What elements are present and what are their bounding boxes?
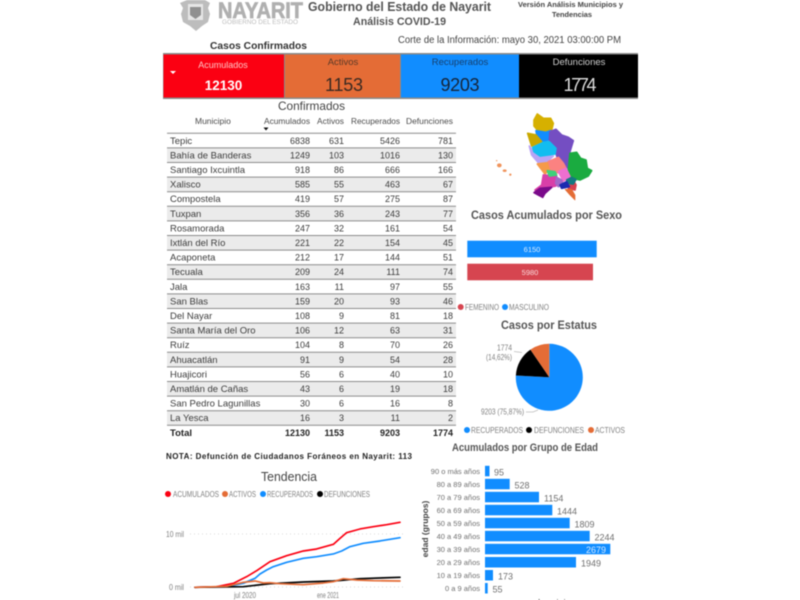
- card: recuperados: [401, 54, 519, 98]
- row: Tuxpan: 243: [385, 209, 400, 219]
- age 50-59: 50 a 59 años: [437, 519, 480, 528]
- row: Amatlán de Cañas: 19: [390, 384, 400, 394]
- age 10-19: 10 a 19 años: [437, 571, 480, 580]
- panel: KPI cards: [163, 53, 638, 99]
- age 60-69: 60 a 69 años: [437, 506, 480, 515]
- row: Bahía de Banderas: 1016: [380, 150, 400, 160]
- table header: [195, 116, 453, 130]
- version note: [518, 0, 624, 19]
- row: Ruíz: 26: [443, 340, 453, 350]
- card: activos: 1153: [325, 75, 363, 95]
- row: San Pedro Lagunillas: 16: [390, 399, 400, 409]
- row: Tepic: 781: [438, 136, 453, 146]
- table header: Defunciones: [406, 116, 453, 126]
- row: Ahuacatlán: [170, 355, 453, 366]
- row: Huajicori: 10: [443, 369, 453, 379]
- row: Tepic: [170, 136, 453, 147]
- row: Tuxpan: [170, 209, 453, 220]
- row: Del Nayar: 108: [295, 311, 310, 321]
- card: acumulados: 12130: [205, 78, 242, 93]
- row: La Yesca: 2: [448, 413, 453, 423]
- row: Del Nayar: 81: [390, 311, 400, 321]
- age 40-49: [437, 531, 615, 542]
- row: Huajicori: [170, 369, 453, 380]
- cut-off date: Corte de la Información: mayo 30, 2021 03:00:00 PM: [398, 35, 621, 46]
- card: acumulados: Acumulados: [198, 60, 248, 70]
- row: Xalisco: 585: [295, 180, 310, 190]
- row: Ahuacatlán: 54: [390, 355, 400, 365]
- card: defunciones: Defunciones: [553, 57, 606, 68]
- row: Amatlán de Cañas: [170, 384, 453, 395]
- legend: status: DEFUNCIONES: [534, 426, 584, 435]
- row: Total: 1153: [324, 428, 344, 438]
- pie label: defunciones: 1774: [497, 344, 512, 352]
- row: Del Nayar: [170, 311, 453, 322]
- row: Ruíz: 8: [339, 340, 344, 350]
- table header: Acumulados: [264, 116, 310, 126]
- row: Santa María del Oro: 63: [390, 326, 400, 336]
- legend: trend: [165, 490, 370, 499]
- row: San Pedro Lagunillas: 6: [339, 399, 344, 409]
- row: Ahuacatlán: 9: [339, 355, 344, 365]
- logo: Nayarit government: [180, 0, 303, 31]
- legend: sex: MASCULINO: [509, 303, 549, 312]
- note: foreign citizens deaths: NOTA: Defunción de Ciudadanos Foráneos en Nayarit: 113: [166, 452, 413, 461]
- row: Bahía de Banderas: Bahía de Banderas: [170, 150, 252, 161]
- row: Rosamorada: 161: [385, 223, 400, 233]
- row: La Yesca: 3: [339, 413, 344, 423]
- legend: status: [464, 426, 625, 435]
- table header: Municipio: [195, 116, 231, 126]
- row: Santa María del Oro: 106: [295, 326, 310, 336]
- axis labels: ene 2021: [317, 591, 339, 600]
- pie label: defunciones: [486, 344, 512, 362]
- row: Acaponeta: 51: [443, 253, 453, 263]
- row: Rosamorada: 54: [443, 223, 453, 233]
- row: Amatlán de Cañas: 43: [300, 384, 310, 394]
- pie label: recuperados: 9203 (75,87%): [481, 408, 524, 416]
- row: Xalisco: 55: [334, 180, 344, 190]
- row: Total: Total: [170, 428, 192, 439]
- line chart: trend: [166, 522, 405, 600]
- row: San Blas: 20: [334, 296, 344, 306]
- row: Tecuala: Tecuala: [170, 267, 203, 278]
- row: Ahuacatlán: 28: [443, 355, 453, 365]
- line: defunciones: [195, 577, 400, 587]
- age 30-39: 30 a 39 años: [437, 545, 480, 554]
- age 70-79: 1154: [544, 494, 563, 504]
- row: San Pedro Lagunillas: 8: [448, 399, 453, 409]
- card: defunciones: 1774: [564, 75, 596, 95]
- age 80-89: 80 a 89 años: [437, 480, 480, 489]
- row: Total: 9203: [380, 428, 400, 438]
- row: Santiago Ixcuintla: 918: [295, 165, 310, 175]
- card: acumulados: [164, 54, 284, 98]
- row: Tuxpan: Tuxpan: [170, 209, 201, 220]
- version note: Tendencias: [552, 10, 592, 19]
- row: Xalisco: 67: [443, 180, 453, 190]
- card: activos: [285, 54, 400, 98]
- legend: sex: FEMENINO: [465, 303, 499, 312]
- row: Huajicori: 56: [300, 369, 310, 379]
- row: Tecuala: 111: [386, 267, 400, 277]
- row: Acaponeta: 212: [295, 253, 310, 263]
- age 0-9: 55: [492, 584, 503, 594]
- row: Acaponeta: 17: [334, 253, 344, 263]
- row: San Blas: [170, 296, 453, 307]
- row: Amatlán de Cañas: 18: [443, 384, 453, 394]
- row: Jala: 11: [335, 282, 344, 292]
- age 30-39: 2679: [586, 545, 606, 555]
- bar: femenino: 5980: [522, 268, 538, 277]
- row: Ixtlán del Río: 154: [385, 238, 400, 248]
- row: Xalisco: [170, 180, 453, 191]
- row: Amatlán de Cañas: 6: [339, 384, 344, 394]
- legend: trend: DEFUNCIONES: [324, 490, 370, 499]
- age 70-79: 70 a 79 años: [437, 493, 480, 502]
- legend: trend: ACUMULADOS: [173, 490, 219, 499]
- row: Ruíz: 70: [390, 340, 400, 350]
- row: Compostela: 87: [443, 194, 453, 204]
- row: Compostela: 419: [295, 194, 310, 204]
- table header: Recuperados: [351, 116, 400, 126]
- row: Rosamorada: 247: [295, 223, 310, 233]
- row: Ahuacatlán: Ahuacatlán: [170, 355, 218, 366]
- icon: coat of arms shield: [180, 0, 210, 31]
- heading: casos confirmados: Casos Confirmados: [210, 40, 307, 52]
- card: activos: Activos: [328, 57, 359, 68]
- row: San Blas: 46: [443, 296, 453, 306]
- legend: status: ACTIVOS: [595, 426, 625, 435]
- age 50-59: [437, 518, 595, 530]
- line: recuperados: [195, 538, 400, 587]
- heading: tendencia: Tendencia: [261, 469, 318, 484]
- pie chart: status: [481, 344, 583, 416]
- row: Ixtlán del Río: 22: [334, 238, 344, 248]
- row: Bahía de Banderas: 103: [329, 150, 344, 160]
- legend: trend: RECUPERADOS: [267, 490, 313, 499]
- row: Ixtlán del Río: [170, 238, 453, 249]
- row: Acaponeta: Acaponeta: [170, 253, 216, 264]
- card: recuperados: Recuperados: [432, 57, 489, 68]
- row: Tecuala: 74: [443, 267, 453, 277]
- row: Total: 12130: [285, 428, 310, 438]
- row: La Yesca: [170, 413, 453, 424]
- row: Santa María del Oro: 31: [443, 326, 453, 336]
- legend: status: RECUPERADOS: [471, 426, 523, 435]
- row: Del Nayar: 9: [339, 311, 344, 321]
- row: Acaponeta: [170, 253, 453, 264]
- row: Tuxpan: 36: [334, 209, 344, 219]
- subtitle: Análisis COVID-19: [353, 16, 446, 28]
- age 30-39: [437, 544, 610, 555]
- row: Tepic: Tepic: [170, 136, 192, 147]
- row: Jala: 163: [295, 282, 310, 292]
- age 40-49: 2244: [594, 532, 615, 542]
- row: Total: [170, 428, 453, 439]
- card: defunciones: [519, 54, 638, 98]
- age 10-19: 173: [498, 572, 513, 582]
- row: Acaponeta: 144: [385, 253, 400, 263]
- age 80-89: 528: [514, 480, 530, 490]
- row: Bahía de Banderas: 1249: [290, 150, 310, 160]
- row: Tepic: 631: [329, 136, 344, 146]
- row: San Blas: San Blas: [170, 296, 208, 307]
- row: Bahía de Banderas: 130: [438, 150, 453, 160]
- axis labels: [166, 530, 339, 600]
- row: San Pedro Lagunillas: San Pedro Lagunillas: [170, 399, 261, 410]
- age 60-69: [437, 505, 577, 516]
- axis labels: 10 mil: [166, 530, 184, 539]
- age 90+: [431, 466, 504, 478]
- row: Tecuala: [170, 267, 453, 278]
- row: Ahuacatlán: 91: [300, 355, 310, 365]
- row: Bahía de Banderas: [170, 150, 453, 161]
- row: Tecuala: 24: [334, 267, 344, 277]
- heading: acumulados por grupo de edad: Acumulados por Grupo de Edad: [452, 442, 598, 454]
- row: Huajicori: 6: [339, 369, 344, 379]
- row: Total: 1774: [433, 428, 453, 438]
- row: Del Nayar: Del Nayar: [170, 311, 212, 322]
- row: Tuxpan: 356: [295, 209, 310, 219]
- row: San Blas: 93: [390, 296, 400, 306]
- row: San Pedro Lagunillas: 30: [300, 399, 310, 409]
- row: Jala: [170, 282, 453, 293]
- row: La Yesca: 16: [300, 413, 310, 423]
- age 40-49: 40 a 49 años: [437, 532, 480, 541]
- row: La Yesca: La Yesca: [170, 413, 209, 424]
- row: La Yesca: 11: [391, 413, 400, 423]
- line: acumulados: [195, 522, 400, 587]
- row: Huajicori: Huajicori: [170, 369, 207, 380]
- row: Santa María del Oro: Santa María del Oro: [170, 326, 256, 337]
- age 80-89: [437, 479, 530, 490]
- age 50-59: 1809: [574, 520, 595, 530]
- row: Huajicori: 40: [390, 369, 400, 379]
- line: activos: [195, 579, 400, 587]
- row: San Pedro Lagunillas: [170, 399, 453, 410]
- age 20-29: 20 a 29 años: [437, 558, 480, 567]
- map: municipalities of Nayarit: [496, 114, 592, 200]
- row: Ruíz: [170, 340, 453, 351]
- age 20-29: [437, 557, 601, 568]
- row: Ruíz: Ruíz: [170, 340, 190, 351]
- age 60-69: 1444: [557, 506, 577, 516]
- row: Santiago Ixcuintla: 86: [334, 165, 344, 175]
- row: Xalisco: 463: [385, 180, 400, 190]
- pie label: defunciones: (14,62%): [486, 353, 512, 362]
- row: Amatlán de Cañas: Amatlán de Cañas: [170, 384, 248, 395]
- age 0-9: [445, 583, 503, 594]
- chart lines: [195, 522, 400, 587]
- legend: sex: [458, 303, 549, 312]
- axis title: edad: edad (grupos): [420, 501, 430, 557]
- row: Compostela: 275: [385, 194, 400, 204]
- row: Santa María del Oro: [170, 326, 453, 337]
- row: Santiago Ixcuintla: 166: [438, 165, 453, 175]
- table header: Activos: [317, 116, 344, 126]
- row: Santa María del Oro: 12: [334, 326, 344, 336]
- legend: trend: ACTIVOS: [229, 490, 256, 499]
- row: Jala: Jala: [170, 282, 188, 293]
- axis labels: 0 mil: [169, 583, 184, 592]
- row: Tecuala: 209: [295, 267, 310, 277]
- row: Jala: 55: [443, 282, 453, 292]
- table: municipios: [167, 116, 456, 439]
- card: recuperados: 9203: [440, 75, 480, 95]
- row: Tuxpan: 77: [443, 209, 453, 219]
- age 10-19: [437, 570, 513, 582]
- logo subtitle: GOBIERNO DEL ESTADO: [222, 19, 298, 26]
- age 90+: 95: [494, 468, 504, 478]
- heading: casos por estatus: Casos por Estatus: [501, 320, 597, 332]
- row: Ixtlán del Río: 45: [443, 238, 453, 248]
- bar chart: age groups: [431, 466, 615, 594]
- axis labels: jul 2020: [233, 591, 256, 600]
- row: Rosamorada: 32: [334, 223, 344, 233]
- bar: masculino: 6150: [524, 245, 540, 254]
- row: Compostela: [170, 194, 453, 205]
- row: Santiago Ixcuintla: 666: [385, 165, 400, 175]
- row: Jala: 97: [390, 282, 400, 292]
- age 0-9: 0 a 9 años: [445, 584, 480, 593]
- row: Compostela: 57: [334, 194, 344, 204]
- version note: Versión Análisis Municipios y: [518, 0, 624, 9]
- row: Xalisco: Xalisco: [170, 180, 201, 191]
- row: Santiago Ixcuintla: [170, 165, 453, 176]
- age 70-79: [437, 492, 563, 504]
- row: Compostela: Compostela: [170, 194, 221, 205]
- row: Santiago Ixcuintla: Santiago Ixcuintla: [170, 165, 246, 176]
- chart: cases by sex: [467, 241, 597, 280]
- row: Tepic: 5426: [380, 136, 400, 146]
- row: San Blas: 159: [295, 296, 310, 306]
- heading: confirmados: Confirmados: [278, 99, 345, 113]
- age 20-29: 1949: [581, 558, 601, 568]
- heading: casos acumulados por sexo: Casos Acumulados por Sexo: [471, 210, 622, 222]
- row: Del Nayar: 18: [443, 311, 453, 321]
- row: Rosamorada: Rosamorada: [170, 223, 225, 234]
- row: Ixtlán del Río: Ixtlán del Río: [170, 238, 225, 249]
- row: Tepic: 6838: [290, 136, 310, 146]
- row: Ruíz: 104: [295, 340, 310, 350]
- row: Ixtlán del Río: 221: [295, 238, 310, 248]
- age 90+: 90 o más años: [431, 467, 480, 476]
- row: Rosamorada: [170, 223, 453, 234]
